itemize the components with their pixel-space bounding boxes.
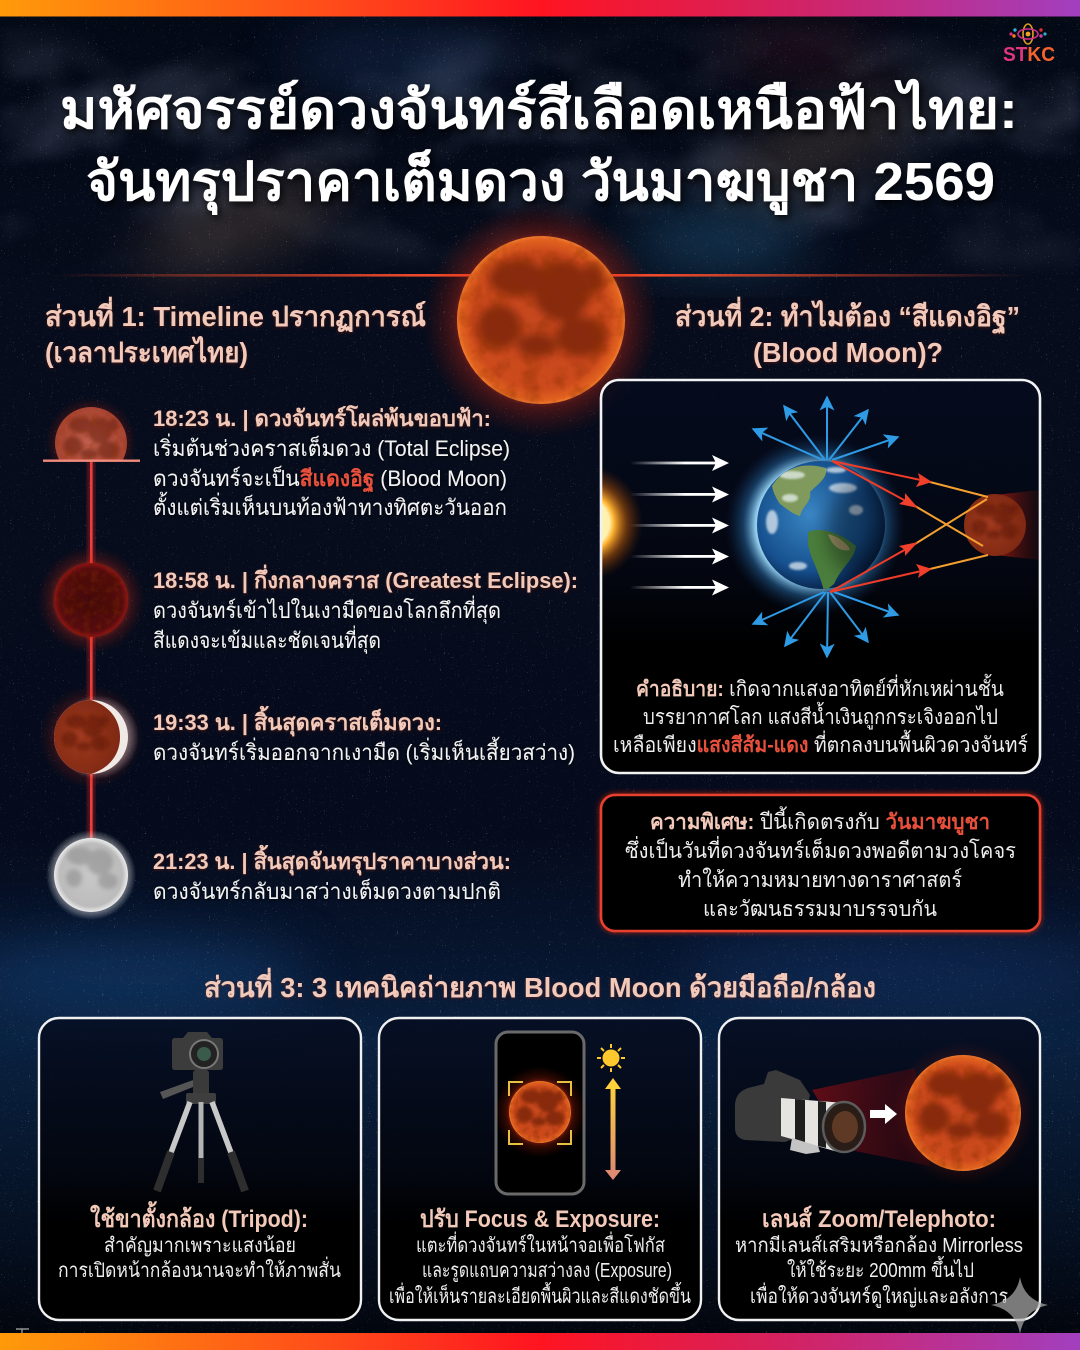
panel: what is special this year: ซึ่งเป็นวันที่ดวงจันทร์เต็มดวงพอดีตามวงโคจร: [625, 836, 1016, 863]
card: telephoto lens: ให้ใช้ระยะ 200mm ขึ้นไป: [787, 1256, 974, 1282]
card: tripod: การเปิดหน้ากล้องนานจะทำให้ภาพสั่น: [58, 1256, 341, 1282]
section 2 heading: ส่วนที่ 2: ทำไมต้อง “สีแดงอิฐ”: [675, 296, 1020, 335]
icon: sparkle watermark: [991, 1277, 1048, 1334]
horizon line of light: [50, 274, 1030, 277]
small eclipsed moon: [964, 490, 1040, 560]
top gradient bar: [0, 0, 1080, 16]
section 2 heading: [675, 296, 1020, 368]
section 1 heading: [45, 296, 426, 368]
explanation text: บรรยากาศโลก แสงสีน้ำเงินถูกกระเจิงออกไป: [643, 702, 998, 730]
timeline entry 18:58: 18:58 น. | กึ่งกลางคราส (Greatest Eclipse):: [153, 564, 578, 593]
small mark bottom left: [16, 1329, 29, 1333]
title: มหัศจรรย์ดวงจันทร์สีเลือดเหนือฟ้าไทย:: [60, 78, 1018, 140]
card: focus and exposure: แตะที่ดวงจันทร์ในหน้าจอเพื่อโฟกัส: [416, 1231, 665, 1257]
card: telephoto lens: หากมีเลนส์เสริมหรือกล้อง Mirrorless: [735, 1234, 1023, 1257]
timeline entry 18:58: สีแดงจะเข้มและชัดเจนที่สุด: [153, 625, 381, 654]
timeline entry 18:23: [153, 404, 510, 520]
title: จันทรุปราคาเต็มดวง วันมาฆบูชา 2569: [86, 150, 995, 216]
card: focus and exposure: [379, 1018, 701, 1320]
panel: what is special this year: และวัฒนธรรมมาบรรจบกัน: [703, 897, 937, 921]
logo: STKC: STKC: [1003, 44, 1055, 66]
section 1 heading: (เวลาประเทศไทย): [45, 336, 248, 368]
timeline entry 21:23: 21:23 น. | สิ้นสุดจันทรุปราคาบางส่วน:: [153, 844, 511, 876]
timeline entry 18:23: ดวงจันทร์จะเป็นสีแดงอิฐ (Blood Moon): [153, 464, 507, 493]
section 1 heading: ส่วนที่ 1: Timeline ปรากฏการณ์: [45, 296, 426, 333]
hero blood moon: [423, 202, 659, 438]
title: [60, 78, 1018, 216]
moon: back to full: [46, 830, 136, 920]
timeline entry 18:23: 18:23 น. | ดวงจันทร์โผล่พ้นขอบฟ้า:: [153, 404, 491, 431]
card: focus and exposure: ปรับ Focus & Exposure:: [420, 1206, 660, 1233]
moon: greatest eclipse: [37, 546, 145, 654]
bottom gradient bar: [0, 1333, 1080, 1350]
card: focus and exposure: และรูดแถบความสว่างลง (Exposure): [422, 1260, 672, 1283]
timeline entry 21:23: ดวงจันทร์กลับมาสว่างเต็มดวงตามปกติ: [153, 877, 501, 904]
panel: what is special this year: [601, 795, 1040, 931]
scattered blue arrows: [753, 397, 898, 657]
timeline entry 19:33: ดวงจันทร์เริ่มออกจากเงามืด (เริ่มเห็นเสี้ยวสว่าง): [153, 737, 575, 765]
icon: exposure slider arrow: [605, 1078, 621, 1180]
card: tripod: [39, 1018, 361, 1320]
section 2 heading: (Blood Moon)?: [753, 337, 943, 368]
panel: what is special this year: ความพิเศษ: ปีนี้เกิดตรงกับ วันมาฆบูชา: [650, 806, 990, 836]
timeline entry 19:33: 19:33 น. | สิ้นสุดคราสเต็มดวง:: [153, 705, 442, 737]
white sun rays: [630, 462, 718, 589]
card: tripod: สำคัญมากเพราะแสงน้อย: [104, 1235, 296, 1257]
diagram: sunlight through the atmosphere: [602, 396, 1038, 658]
logo: STKC: [1003, 24, 1055, 66]
card: telephoto lens: เลนส์ Zoom/Telephoto:: [762, 1205, 996, 1233]
card: tripod: ใช้ขาตั้งกล้อง (Tripod):: [90, 1200, 308, 1233]
card: telephoto lens: เพื่อให้ดวงจันทร์ดูใหญ่และอลังการ: [750, 1282, 1008, 1309]
icon: sun brightness: [597, 1044, 625, 1072]
moon: rising over the horizon: [43, 400, 140, 462]
earth: [726, 439, 902, 612]
icon: moon through lens: [891, 1041, 1035, 1185]
arrow: to moon: [870, 1104, 897, 1124]
timeline entry 18:58: [153, 564, 578, 654]
timeline connector: [87, 460, 95, 840]
timeline entry 18:23: ตั้งแต่เริ่มเห็นบนท้องฟ้าทางทิศตะวันออก: [153, 492, 507, 520]
icon: camera beam: [812, 1068, 930, 1166]
explanation text: [613, 674, 1028, 757]
panel: why the moon turns red: [600, 378, 1042, 774]
icon: camera on tripod: [157, 1032, 245, 1191]
moon: end of totality: [39, 685, 143, 789]
timeline entry 21:23: [153, 844, 511, 904]
card: telephoto lens: [719, 1018, 1040, 1320]
card: focus and exposure: เพื่อให้เห็นรายละเอียดพื้นผิวและสีแดงชัดขึ้น: [389, 1282, 691, 1308]
sun: [602, 470, 641, 576]
panel: what is special this year: ทำให้ความหมายทางดาราศาสตร์: [678, 867, 962, 892]
icon: phone showing moon: [494, 1032, 586, 1194]
timeline entry 19:33: [153, 705, 575, 765]
refracted red light rays: [830, 461, 988, 592]
timeline entry 18:23: เริ่มต้นช่วงคราสเต็มดวง (Total Eclipse): [153, 433, 510, 461]
explanation text: คำอธิบาย: เกิดจากแสงอาทิตย์ที่หักเหผ่านชั้น: [636, 674, 1004, 701]
icon: DSLR with telephoto lens: [735, 1070, 865, 1154]
timeline entry 18:58: ดวงจันทร์เข้าไปในเงามืดของโลกลึกที่สุด: [153, 595, 501, 624]
section 3 heading: ส่วนที่ 3: 3 เทคนิคถ่ายภาพ Blood Moon ด้วยมือถือ/กล้อง: [204, 967, 876, 1003]
explanation text: เหลือเพียงแสงสีส้ม-แดง ที่ตกลงบนพื้นผิวดวงจันทร์: [613, 730, 1028, 757]
